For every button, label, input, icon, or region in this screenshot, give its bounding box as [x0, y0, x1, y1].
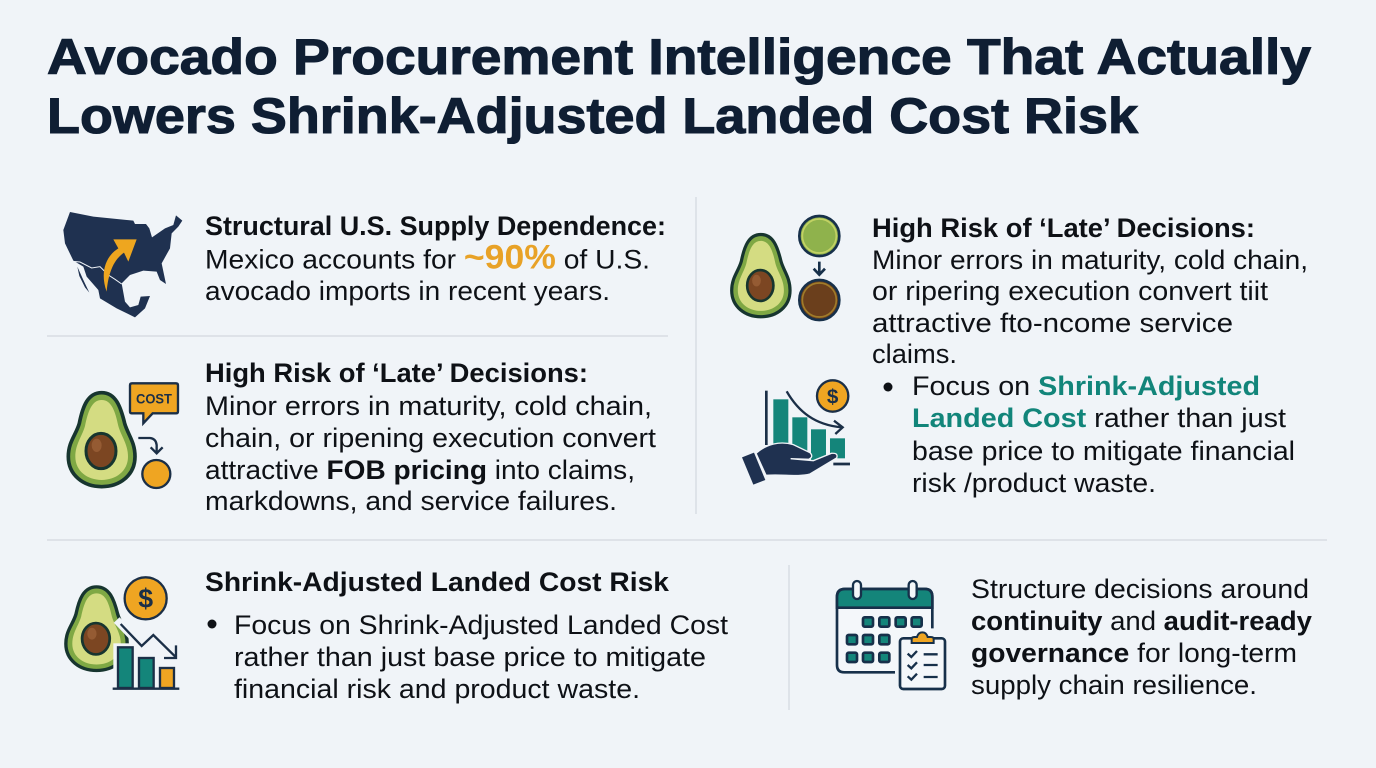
- body text: supply chain resilience.: [971, 670, 1257, 700]
- body text: or ripering execution convert tiit: [872, 276, 1269, 306]
- body text: Minor errors in maturity, cold chain,: [205, 391, 652, 421]
- bullet text: base price to mitigate financial: [912, 436, 1295, 466]
- body text: claims.: [872, 339, 957, 369]
- panel: high risk of late decisions, right: [732, 213, 1308, 498]
- title: Avocado Procurement Intelligence That Actually: [47, 29, 1311, 85]
- body text: continuity and audit-ready: [971, 606, 1312, 636]
- heading: Shrink-Adjusted Landed Cost Risk: [205, 567, 670, 597]
- panel: shrink-adjusted landed cost risk: [66, 567, 729, 704]
- panel: high risk of late decisions, left: [68, 358, 657, 516]
- bullet text: risk /product waste.: [912, 468, 1156, 498]
- bullet text: Focus on Shrink-Adjusted: [912, 371, 1260, 401]
- bullet text: financial risk and product waste.: [234, 674, 640, 704]
- heading: High Risk of ‘Late’ Decisions:: [872, 213, 1255, 243]
- body text: [205, 238, 650, 306]
- body text: [971, 574, 1312, 700]
- icon: avocado with ripening stages: [732, 216, 839, 320]
- icon: avocado with cost tag: [68, 383, 178, 488]
- bullet text: [884, 371, 1295, 498]
- icon: avocado with dollar and falling bars: $: [138, 584, 153, 614]
- body text: Structure decisions around: [971, 574, 1309, 604]
- icon: avocado with cost tag: COST: [136, 390, 172, 406]
- bullet text: [208, 610, 729, 704]
- panel: continuity and governance: [837, 574, 1312, 700]
- body text: [205, 391, 657, 516]
- body text: governance for long-term: [971, 638, 1297, 668]
- body text: attractive FOB pricing into claims,: [205, 455, 635, 485]
- icon: hand holding falling cost chart: [742, 380, 850, 485]
- title: Lowers Shrink-Adjusted Landed Cost Risk: [47, 88, 1138, 144]
- body text: avocado imports in recent years.: [205, 276, 610, 306]
- icon: hand holding falling cost chart: $: [827, 385, 839, 408]
- body text: Minor errors in maturity, cold chain,: [872, 245, 1308, 275]
- body text: attractive fto-ncome service: [872, 308, 1233, 338]
- body text: markdowns, and service failures.: [205, 486, 617, 516]
- bullet text: Focus on Shrink-Adjusted Landed Cost: [234, 610, 729, 640]
- body text: Mexico accounts for ~90% of U.S.: [205, 238, 650, 276]
- icon: North America map with import arrow: [63, 212, 182, 317]
- icon: avocado with dollar and falling bars: [66, 577, 180, 693]
- heading: High Risk of ‘Late’ Decisions:: [205, 358, 588, 388]
- icon: calendar with checklist: [837, 581, 945, 689]
- bullet text: Landed Cost rather than just: [912, 403, 1287, 433]
- bullet text: rather than just base price to mitigate: [234, 642, 706, 672]
- heading: Structural U.S. Supply Dependence:: [205, 211, 666, 241]
- title: [47, 29, 1311, 144]
- panel: structural supply dependence: [63, 211, 666, 317]
- body text: chain, or ripening execution convert: [205, 423, 657, 453]
- body text: [872, 245, 1308, 369]
